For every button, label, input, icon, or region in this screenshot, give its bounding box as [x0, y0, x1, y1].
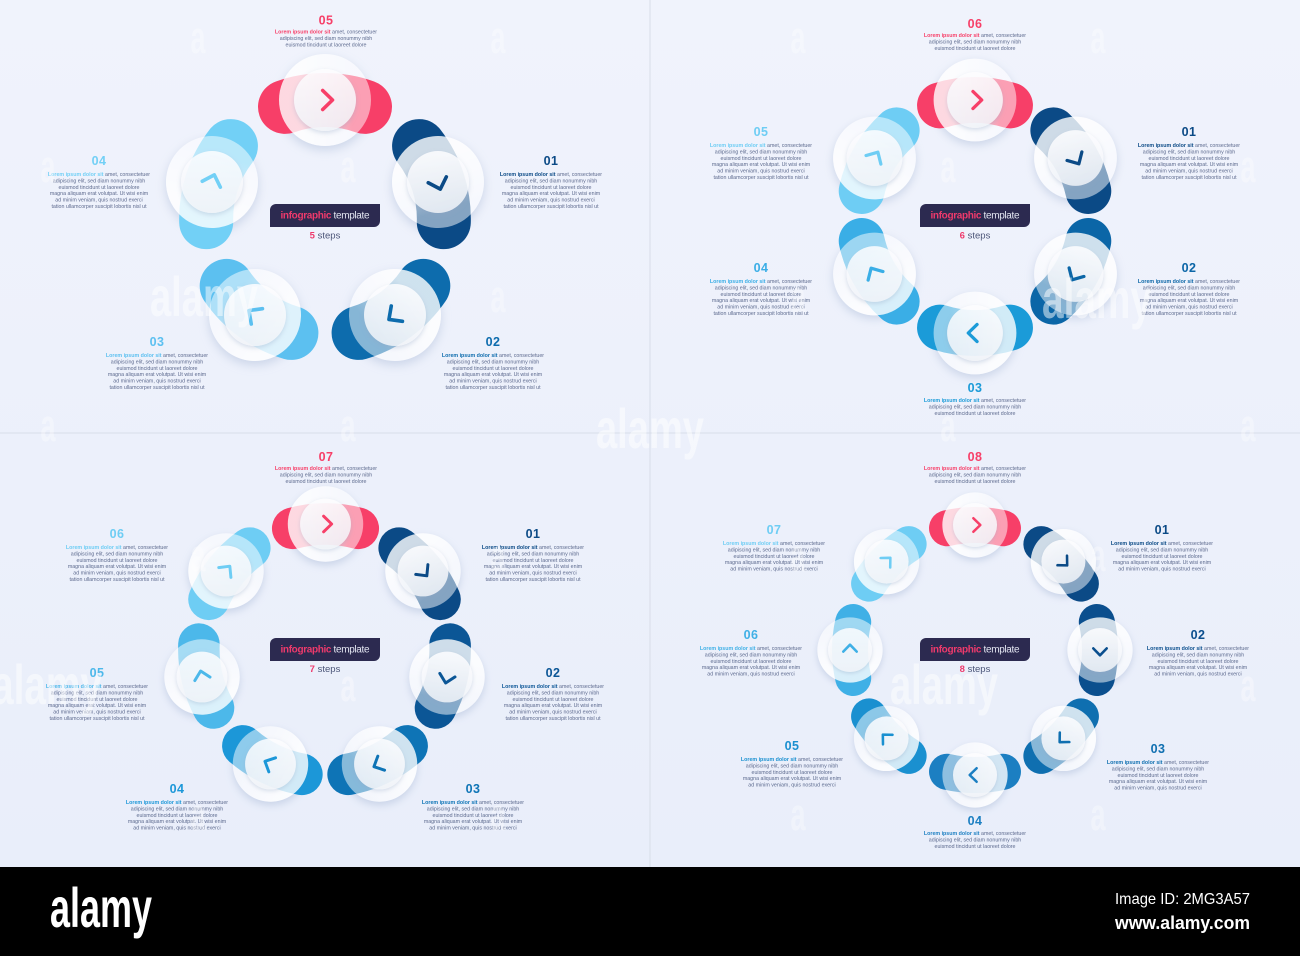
- step 06 node: [934, 59, 1016, 141]
- text: step 06: magna aliquam erat volutpat. Ut wisi enim: [68, 564, 167, 570]
- text: step 03: adipiscing elit, sed diam nonummy nibh: [1112, 766, 1204, 772]
- footer url: www.alamy.com: [1114, 913, 1250, 933]
- text: step 02: Lorem ipsum dolor sit amet, consectetuer: [1147, 646, 1249, 652]
- text: step 01: Lorem ipsum dolor sit amet, consectetuer: [1111, 541, 1213, 547]
- step 05 node: [157, 632, 247, 722]
- text: step 03: euismod tincidunt ut laoreet dolore: [1118, 773, 1199, 779]
- text: step 04: adipiscing elit, sed diam nonummy nibh: [929, 837, 1021, 843]
- text: step 06: euismod tincidunt ut laoreet dolore: [935, 46, 1016, 52]
- text: step 05: [741, 739, 843, 789]
- text: step 03: ad minim veniam, quis nostrud exerci: [113, 379, 201, 385]
- text: step 02: tation ullamcorper suscipit lobortis nisl ut: [445, 385, 541, 391]
- text: step 05: Lorem ipsum dolor sit amet, consectetuer: [710, 143, 812, 149]
- text: step 06: 06: [110, 527, 124, 541]
- watermarks: a: [340, 400, 356, 451]
- watermarks: a: [490, 789, 506, 840]
- text: step 08: Lorem ipsum dolor sit amet, consectetuer: [924, 466, 1026, 472]
- text: step 01: [1138, 125, 1240, 181]
- text: step 02: [1147, 628, 1249, 678]
- text: step 04: ad minim veniam, quis nostrud exerci: [55, 198, 143, 204]
- watermarks: a: [940, 141, 956, 192]
- text: step 02: euismod tincidunt ut laoreet dolore: [453, 366, 534, 372]
- text: step 04: euismod tincidunt ut laoreet dolore: [935, 844, 1016, 850]
- step 05 node: [818, 101, 931, 215]
- text: step 07: magna aliquam erat volutpat. Ut wisi enim: [725, 560, 824, 566]
- step 05 node: [279, 54, 371, 146]
- text: step 06: Lorem ipsum dolor sit amet, consectetuer: [924, 33, 1026, 39]
- watermarks: alamy: [150, 265, 258, 328]
- center label: 8 steps: infographic template: [930, 644, 1020, 656]
- center label: 7 steps: 7 steps: [310, 664, 341, 675]
- text: step 01: magna aliquam erat volutpat. Ut wisi enim: [1140, 162, 1239, 168]
- text: step 05: Lorem ipsum dolor sit amet, consectetuer: [741, 757, 843, 763]
- watermarks: alamy: [890, 653, 998, 716]
- text: step 01: magna aliquam erat volutpat. Ut wisi enim: [1113, 560, 1212, 566]
- text: step 01: 01: [526, 527, 540, 541]
- text: step 08: 08: [968, 450, 982, 464]
- text: step 01: 01: [544, 154, 558, 168]
- text: step 05: [275, 14, 377, 48]
- watermarks: a: [490, 530, 506, 581]
- text: step 01: Lorem ipsum dolor sit amet, consectetuer: [1138, 143, 1240, 149]
- step 03 node: [934, 292, 1016, 374]
- text: step 02: euismod tincidunt ut laoreet dolore: [1158, 659, 1239, 665]
- text: step 03: magna aliquam erat volutpat. Ut wisi enim: [1109, 779, 1208, 785]
- text: step 07: [275, 450, 377, 485]
- text: step 06: adipiscing elit, sed diam nonummy nibh: [71, 551, 163, 557]
- text: step 02: adipiscing elit, sed diam nonummy nibh: [507, 690, 599, 696]
- text: step 07: Lorem ipsum dolor sit amet, consectetuer: [723, 541, 825, 547]
- text: step 05: magna aliquam erat volutpat. Ut wisi enim: [48, 703, 147, 709]
- watermarks: a: [790, 12, 806, 63]
- watermarks: a: [1240, 400, 1256, 451]
- text: step 03: 03: [968, 381, 982, 395]
- text: step 04: adipiscing elit, sed diam nonummy nibh: [53, 178, 145, 184]
- step 01 node: [380, 124, 496, 240]
- text: step 05: [46, 666, 148, 722]
- step 03 node: [1017, 692, 1110, 785]
- step 06 node: [817, 617, 883, 683]
- text: step 06: euismod tincidunt ut laoreet dolore: [77, 558, 158, 564]
- text: step 07: ad minim veniam, quis nostrud exerci: [730, 567, 818, 573]
- text: step 03: [422, 782, 524, 832]
- text: step 02: [1138, 261, 1240, 317]
- text: step 04: tation ullamcorper suscipit lobortis nisl ut: [51, 204, 147, 210]
- text: step 01: euismod tincidunt ut laoreet dolore: [493, 558, 574, 564]
- watermarks: a: [790, 789, 806, 840]
- text: step 01: euismod tincidunt ut laoreet dolore: [1149, 156, 1230, 162]
- text: step 01: tation ullamcorper suscipit lobortis nisl ut: [503, 204, 599, 210]
- text: step 01: ad minim veniam, quis nostrud exerci: [489, 571, 577, 577]
- text: step 07: 07: [767, 523, 781, 537]
- center label: 6 steps: infographic template: [930, 210, 1020, 222]
- watermarks: a: [940, 400, 956, 451]
- text: step 05: [710, 125, 812, 181]
- text: step 04: 04: [968, 814, 982, 828]
- text: step 01: 01: [1182, 125, 1196, 139]
- watermarks: a: [1090, 12, 1106, 63]
- text: step 02: tation ullamcorper suscipit lobortis nisl ut: [505, 716, 601, 722]
- text: step 03: adipiscing elit, sed diam nonummy nibh: [427, 806, 519, 812]
- text: step 02: 02: [486, 335, 500, 349]
- text: step 01: tation ullamcorper suscipit lobortis nisl ut: [485, 577, 581, 583]
- text: step 03: [1107, 742, 1209, 792]
- step 02 node: [1019, 217, 1132, 331]
- text: step 03: adipiscing elit, sed diam nonummy nibh: [929, 404, 1021, 410]
- footer bar: [0, 867, 1300, 956]
- text: step 02: Lorem ipsum dolor sit amet, consectetuer: [502, 684, 604, 690]
- center label: 5 steps: [270, 204, 380, 242]
- text: step 03: Lorem ipsum dolor sit amet, consectetuer: [106, 353, 208, 359]
- text: step 05: 05: [785, 739, 799, 753]
- text: step 06: [700, 628, 802, 678]
- text: step 02: 02: [546, 666, 560, 680]
- text: step 07: euismod tincidunt ut laoreet dolore: [286, 479, 367, 485]
- text: step 01: magna aliquam erat volutpat. Ut wisi enim: [484, 564, 583, 570]
- watermarks: a: [340, 141, 356, 192]
- text: step 02: ad minim veniam, quis nostrud exerci: [1154, 672, 1242, 678]
- text: step 07: [723, 523, 825, 573]
- text: step 02: magna aliquam erat volutpat. Ut wisi enim: [504, 703, 603, 709]
- footer logo: alamy: [50, 876, 152, 939]
- text: step 04: 04: [170, 782, 184, 796]
- center label: 6 steps: [920, 204, 1030, 242]
- text: step 03: Lorem ipsum dolor sit amet, consectetuer: [1107, 760, 1209, 766]
- text: step 01: ad minim veniam, quis nostrud exerci: [1118, 567, 1206, 573]
- text: step 03: ad minim veniam, quis nostrud exerci: [429, 826, 517, 832]
- text: step 04: magna aliquam erat volutpat. Ut wisi enim: [712, 298, 811, 304]
- text: step 08: adipiscing elit, sed diam nonummy nibh: [929, 472, 1021, 478]
- text: step 01: 01: [1155, 523, 1169, 537]
- watermarks: a: [190, 530, 206, 581]
- text: step 03: [106, 335, 208, 391]
- text: step 01: adipiscing elit, sed diam nonummy nibh: [1143, 149, 1235, 155]
- text: step 01: ad minim veniam, quis nostrud exerci: [507, 198, 595, 204]
- center label: 5 steps: 5 steps: [310, 230, 341, 242]
- watermarks: a: [1090, 530, 1106, 581]
- text: step 01: [1111, 523, 1213, 573]
- text: step 04: [48, 154, 150, 210]
- step 03 node: [191, 251, 319, 379]
- text: step 01: tation ullamcorper suscipit lobortis nisl ut: [1141, 175, 1237, 181]
- panel: 5 steps: [48, 14, 602, 391]
- text: step 02: [502, 666, 604, 722]
- watermarks: a: [40, 400, 56, 451]
- text: step 04: magna aliquam erat volutpat. Ut wisi enim: [128, 819, 227, 825]
- text: step 08: [924, 450, 1026, 485]
- text: step 06: adipiscing elit, sed diam nonummy nibh: [705, 652, 797, 658]
- text: step 01: adipiscing elit, sed diam nonummy nibh: [505, 178, 597, 184]
- text: step 05: tation ullamcorper suscipit lobortis nisl ut: [49, 716, 145, 722]
- text: step 02: adipiscing elit, sed diam nonummy nibh: [1143, 285, 1235, 291]
- text: step 04: ad minim veniam, quis nostrud exerci: [717, 305, 805, 311]
- text: step 04: Lorem ipsum dolor sit amet, consectetuer: [710, 279, 812, 285]
- text: step 07: Lorem ipsum dolor sit amet, consectetuer: [275, 466, 377, 472]
- text: step 05: euismod tincidunt ut laoreet dolore: [286, 42, 367, 48]
- text: step 04: Lorem ipsum dolor sit amet, consectetuer: [48, 172, 150, 178]
- text: step 06: ad minim veniam, quis nostrud exerci: [73, 571, 161, 577]
- text: step 05: ad minim veniam, quis nostrud exerci: [748, 783, 836, 789]
- text: step 02: ad minim veniam, quis nostrud exerci: [1145, 305, 1233, 311]
- center label: 8 steps: [920, 638, 1030, 675]
- text: step 04: euismod tincidunt ut laoreet dolore: [137, 813, 218, 819]
- text: step 03: 03: [466, 782, 480, 796]
- text: step 06: euismod tincidunt ut laoreet dolore: [711, 659, 792, 665]
- text: step 01: [482, 527, 584, 583]
- text: step 05: euismod tincidunt ut laoreet dolore: [57, 697, 138, 703]
- center label: 6 steps: 6 steps: [960, 230, 991, 242]
- text: step 01: euismod tincidunt ut laoreet dolore: [1122, 554, 1203, 560]
- text: step 04: [710, 261, 812, 317]
- step 08 node: [942, 492, 1008, 558]
- step 01 node: [1017, 515, 1110, 608]
- text: step 02: magna aliquam erat volutpat. Ut wisi enim: [444, 372, 543, 378]
- text: step 06: tation ullamcorper suscipit lobortis nisl ut: [69, 577, 165, 583]
- text: step 05: Lorem ipsum dolor sit amet, consectetuer: [46, 684, 148, 690]
- text: step 05: ad minim veniam, quis nostrud exerci: [717, 169, 805, 175]
- text: step 02: 02: [1182, 261, 1196, 275]
- text: step 01: magna aliquam erat volutpat. Ut wisi enim: [502, 191, 601, 197]
- step 05 node: [840, 692, 933, 785]
- text: step 02: Lorem ipsum dolor sit amet, consectetuer: [442, 353, 544, 359]
- center label: 5 steps: infographic template: [280, 210, 370, 222]
- watermarks: a: [190, 12, 206, 63]
- text: step 05: adipiscing elit, sed diam nonummy nibh: [715, 149, 807, 155]
- center label: 7 steps: infographic template: [280, 644, 370, 656]
- step 02 node: [1067, 617, 1133, 683]
- text: step 01: Lorem ipsum dolor sit amet, consectetuer: [500, 172, 602, 178]
- step 01 node: [1019, 101, 1132, 215]
- text: step 06: [924, 17, 1026, 52]
- text: step 04: ad minim veniam, quis nostrud exerci: [133, 826, 221, 832]
- center label: 8 steps: 8 steps: [960, 664, 991, 675]
- text: step 05: euismod tincidunt ut laoreet dolore: [721, 156, 802, 162]
- text: step 04: Lorem ipsum dolor sit amet, consectetuer: [126, 800, 228, 806]
- text: step 07: euismod tincidunt ut laoreet dolore: [734, 554, 815, 560]
- text: step 02: euismod tincidunt ut laoreet dolore: [1149, 292, 1230, 298]
- text: step 03: Lorem ipsum dolor sit amet, consectetuer: [422, 800, 524, 806]
- panel: 7 steps: [46, 450, 604, 832]
- text: step 03: euismod tincidunt ut laoreet dolore: [117, 366, 198, 372]
- text: step 08: euismod tincidunt ut laoreet dolore: [935, 479, 1016, 485]
- text: step 03: magna aliquam erat volutpat. Ut wisi enim: [424, 819, 523, 825]
- text: step 01: euismod tincidunt ut laoreet dolore: [511, 185, 592, 191]
- text: step 05: 05: [90, 666, 104, 680]
- text: step 06: magna aliquam erat volutpat. Ut wisi enim: [702, 665, 801, 671]
- text: step 01: ad minim veniam, quis nostrud exerci: [1145, 169, 1233, 175]
- watermarks: a: [40, 141, 56, 192]
- text: step 01: Lorem ipsum dolor sit amet, consectetuer: [482, 545, 584, 551]
- text: step 05: Lorem ipsum dolor sit amet, consectetuer: [275, 30, 377, 36]
- text: step 05: euismod tincidunt ut laoreet dolore: [752, 770, 833, 776]
- step 02 node: [331, 251, 459, 379]
- watermarks: a: [1240, 141, 1256, 192]
- text: step 01: adipiscing elit, sed diam nonummy nibh: [487, 551, 579, 557]
- text: step 03: adipiscing elit, sed diam nonummy nibh: [111, 359, 203, 365]
- text: step 03: 03: [1151, 742, 1165, 756]
- text: step 02: adipiscing elit, sed diam nonummy nibh: [447, 359, 539, 365]
- watermarks: alamy: [596, 397, 704, 460]
- text: step 05: 05: [754, 125, 768, 139]
- text: step 04: tation ullamcorper suscipit lobortis nisl ut: [713, 311, 809, 317]
- text: step 03: ad minim veniam, quis nostrud exerci: [1114, 786, 1202, 792]
- text: step 04: magna aliquam erat volutpat. Ut wisi enim: [50, 191, 149, 197]
- text: step 02: ad minim veniam, quis nostrud exerci: [509, 710, 597, 716]
- watermarks: a: [1090, 789, 1106, 840]
- watermarks: a: [340, 660, 356, 711]
- text: step 05: tation ullamcorper suscipit lobortis nisl ut: [713, 175, 809, 181]
- step 02 node: [402, 632, 492, 722]
- step 04 node: [942, 742, 1008, 808]
- text: step 01: [500, 154, 602, 210]
- text: step 06: Lorem ipsum dolor sit amet, consectetuer: [66, 545, 168, 551]
- text: step 04: 04: [754, 261, 768, 275]
- watermarks: a: [790, 271, 806, 322]
- step 04 node: [220, 714, 321, 814]
- step 04 node: [154, 124, 270, 240]
- watermarks: alamy: [1042, 267, 1152, 330]
- text: step 05: magna aliquam erat volutpat. Ut wisi enim: [712, 162, 811, 168]
- text: step 03: 03: [150, 335, 164, 349]
- step 07 node: [288, 486, 363, 562]
- text: step 02: magna aliquam erat volutpat. Ut wisi enim: [1149, 665, 1248, 671]
- text: step 03: magna aliquam erat volutpat. Ut wisi enim: [108, 372, 207, 378]
- panel: 8 steps: [700, 450, 1249, 850]
- text: step 04: [126, 782, 228, 832]
- step 07 node: [840, 515, 933, 608]
- panel: 6 steps: [710, 17, 1240, 417]
- text: step 07: adipiscing elit, sed diam nonummy nibh: [280, 472, 372, 478]
- text: step 04: adipiscing elit, sed diam nonummy nibh: [131, 806, 223, 812]
- text: step 03: Lorem ipsum dolor sit amet, consectetuer: [924, 398, 1026, 404]
- text: step 06: adipiscing elit, sed diam nonummy nibh: [929, 39, 1021, 45]
- step 06 node: [173, 518, 279, 624]
- step 04 node: [818, 217, 931, 331]
- watermarks: a: [490, 12, 506, 63]
- text: step 07: adipiscing elit, sed diam nonummy nibh: [728, 547, 820, 553]
- text: step 05: ad minim veniam, quis nostrud exerci: [53, 710, 141, 716]
- step 01 node: [370, 518, 476, 624]
- text: step 02: adipiscing elit, sed diam nonummy nibh: [1152, 652, 1244, 658]
- text: step 06: [66, 527, 168, 583]
- text: step 06: 06: [744, 628, 758, 642]
- text: step 05: magna aliquam erat volutpat. Ut wisi enim: [743, 776, 842, 782]
- watermarks: a: [190, 789, 206, 840]
- text: step 05: adipiscing elit, sed diam nonummy nibh: [51, 690, 143, 696]
- text: step 04: Lorem ipsum dolor sit amet, consectetuer: [924, 831, 1026, 837]
- text: step 03: [924, 381, 1026, 417]
- text: step 05: adipiscing elit, sed diam nonummy nibh: [746, 763, 838, 769]
- text: step 02: Lorem ipsum dolor sit amet, consectetuer: [1138, 279, 1240, 285]
- text: step 06: 06: [968, 17, 982, 31]
- text: step 03: euismod tincidunt ut laoreet dolore: [935, 411, 1016, 417]
- text: step 04: euismod tincidunt ut laoreet dolore: [721, 292, 802, 298]
- text: step 02: magna aliquam erat volutpat. Ut wisi enim: [1140, 298, 1239, 304]
- text: step 02: euismod tincidunt ut laoreet dolore: [513, 697, 594, 703]
- watermarks: a: [1240, 660, 1256, 711]
- text: step 06: Lorem ipsum dolor sit amet, consectetuer: [700, 646, 802, 652]
- text: step 02: tation ullamcorper suscipit lobortis nisl ut: [1141, 311, 1237, 317]
- text: step 05: adipiscing elit, sed diam nonummy nibh: [280, 36, 372, 42]
- text: step 07: 07: [319, 450, 333, 464]
- center label: 7 steps: [270, 638, 380, 675]
- text: step 01: adipiscing elit, sed diam nonummy nibh: [1116, 547, 1208, 553]
- text: step 02: [442, 335, 544, 391]
- text: step 06: ad minim veniam, quis nostrud exerci: [707, 672, 795, 678]
- step 03 node: [329, 714, 430, 814]
- text: step 03: euismod tincidunt ut laoreet dolore: [433, 813, 514, 819]
- text: step 03: tation ullamcorper suscipit lobortis nisl ut: [109, 385, 205, 391]
- footer image id: Image ID: 2MG3A57: [1115, 891, 1250, 908]
- watermarks: a: [790, 530, 806, 581]
- text: step 05: 05: [319, 14, 333, 28]
- text: step 04: 04: [92, 154, 106, 168]
- watermarks: a: [490, 271, 506, 322]
- text: step 04: [924, 814, 1026, 850]
- text: step 02: 02: [1191, 628, 1205, 642]
- text: step 04: adipiscing elit, sed diam nonummy nibh: [715, 285, 807, 291]
- text: step 02: ad minim veniam, quis nostrud exerci: [449, 379, 537, 385]
- text: step 04: euismod tincidunt ut laoreet dolore: [59, 185, 140, 191]
